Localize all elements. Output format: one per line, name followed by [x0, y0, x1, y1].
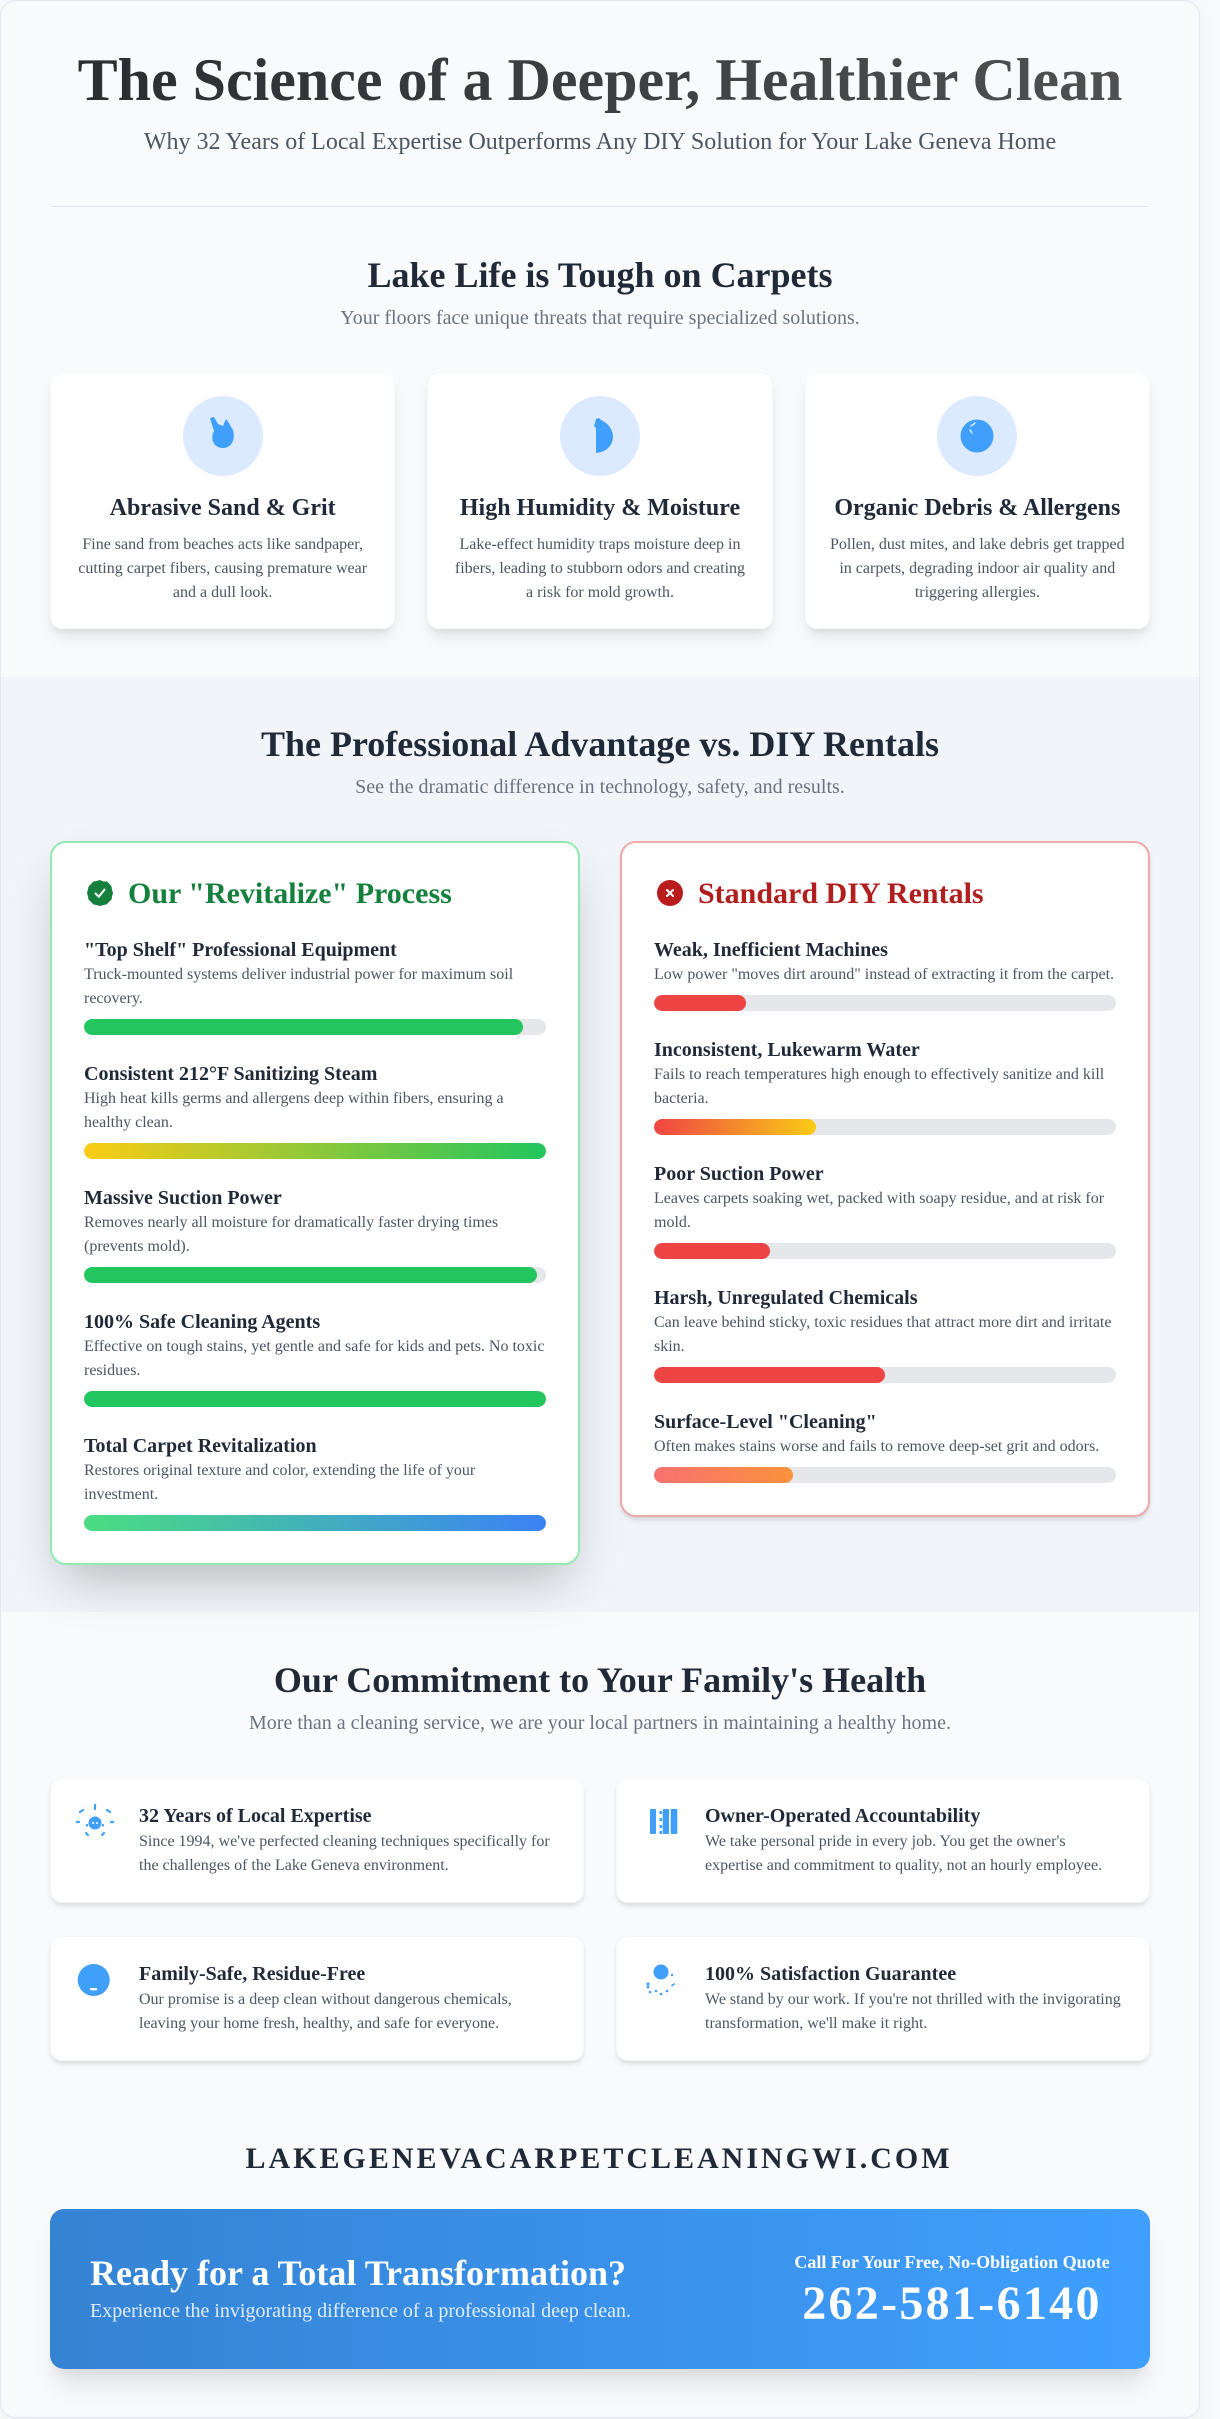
- item: suction: (prevents mold).: [84, 1238, 190, 1255]
- item: safe agents: residues.: [84, 1362, 140, 1379]
- card: humidity: fibers, leading to stubborn odors and creating: [455, 560, 745, 577]
- item: safe agents: Effective on tough stains, yet gentle and safe for kids and pets. No toxic: [84, 1338, 544, 1355]
- cta headline: Ready for a Total Transformation?: [90, 2253, 626, 2293]
- cta subtext: Experience the invigorating difference of a professional deep clean.: [90, 2300, 631, 2322]
- item: suction: Removes nearly all moisture for dramatically faster drying times: [84, 1214, 498, 1231]
- feature text: [139, 1833, 550, 1874]
- subheading: lake life: Your floors face unique threats that require specialized solutions.: [340, 307, 860, 329]
- card: abrasive sand: Fine sand from beaches acts like sandpaper,: [82, 536, 363, 553]
- item: water: Inconsistent, Lukewarm Water: [654, 1039, 920, 1061]
- heading: advantage: The Professional Advantage vs. DIY Rentals: [261, 724, 939, 764]
- subheading: commitment: More than a cleaning service, we are your local partners in maintaining a healthy home.: [249, 1712, 951, 1734]
- item: steam: healthy clean.: [84, 1114, 173, 1131]
- panel: revitalize process: [50, 841, 580, 1565]
- card: abrasive sand: cutting carpet fibers, causing premature wear: [78, 560, 367, 577]
- card: abrasive sand: and a dull look.: [173, 584, 272, 601]
- item: water: Fails to reach temperatures high enough to effectively sanitize and kill: [654, 1066, 1104, 1083]
- card: organic debris: in carpets, degrading indoor air quality and: [839, 560, 1115, 577]
- card: organic debris: [805, 372, 1150, 629]
- feature text: [139, 1991, 512, 2032]
- icon: debris: [937, 396, 1017, 476]
- item: machines: [654, 939, 1116, 1011]
- feature title: Owner-Operated Accountability: [705, 1805, 980, 1827]
- icon: sun badge: [76, 1804, 114, 1836]
- feature: expertise: [50, 1778, 584, 1903]
- heading: commitment: Our Commitment to Your Family's Health: [274, 1660, 926, 1700]
- item: poor suction: Poor Suction Power: [654, 1163, 824, 1185]
- feature text: expertise and commitment to quality, not an hourly employee.: [705, 1857, 1102, 1874]
- item: poor suction: Leaves carpets soaking wet, packed with soapy residue, and at risk for: [654, 1190, 1104, 1207]
- item: water: [654, 1039, 1116, 1135]
- item: surface cleaning: [654, 1411, 1116, 1483]
- item: steam: Consistent 212°F Sanitizing Steam: [84, 1063, 377, 1085]
- item: revitalization: [84, 1435, 546, 1531]
- item: equipment: recovery.: [84, 990, 143, 1007]
- feature text: transformation, we'll make it right.: [705, 2015, 927, 2032]
- item: poor suction: [654, 1163, 1116, 1259]
- item: surface cleaning: Surface-Level "Cleaning": [654, 1411, 877, 1433]
- item: water: bacteria.: [654, 1090, 709, 1107]
- card: humidity: [427, 372, 773, 629]
- call to action banner: [50, 2209, 1150, 2369]
- card: organic debris: Pollen, dust mites, and lake debris get trapped: [830, 536, 1125, 553]
- item: safe agents: [84, 1311, 546, 1407]
- section band: professional advantage: [0, 677, 1200, 1612]
- feature: guarantee: [616, 1936, 1150, 2061]
- item: equipment: "Top Shelf" Professional Equipment: [84, 939, 397, 961]
- item: poor suction: mold.: [654, 1214, 691, 1231]
- feature title: 32 Years of Local Expertise: [139, 1805, 372, 1827]
- item: steam: [84, 1063, 546, 1159]
- feature text: leaving your home fresh, healthy, and safe for everyone.: [139, 2015, 499, 2032]
- card: organic debris: Organic Debris & Allergens: [834, 495, 1120, 521]
- title: The Science of a Deeper, Healthier Clean: [78, 47, 1122, 113]
- icon: droplets: [646, 1964, 675, 1996]
- item: equipment: Truck-mounted systems deliver industrial power for maximum soil: [84, 966, 513, 983]
- feature title: Family-Safe, Residue-Free: [139, 1963, 365, 1985]
- item: revitalization: Total Carpet Revitalization: [84, 1435, 317, 1457]
- item: safe agents: 100% Safe Cleaning Agents: [84, 1311, 320, 1333]
- panel title: Our "Revitalize" Process: [128, 877, 452, 910]
- feature text: the challenges of the Lake Geneva environment.: [139, 1857, 449, 1874]
- feature text: We take personal pride in every job. You get the owner's: [705, 1833, 1066, 1850]
- card: abrasive sand: Abrasive Sand & Grit: [110, 495, 336, 521]
- icon: circle: [78, 1964, 110, 1996]
- item: chemicals: Can leave behind sticky, toxic residues that attract more dirt and irritate: [654, 1314, 1111, 1331]
- feature text: [705, 1991, 1121, 2032]
- item: equipment: [84, 939, 546, 1035]
- card: humidity: a risk for mold growth.: [526, 584, 674, 601]
- item: suction: [84, 1187, 546, 1283]
- subtitle: Why 32 Years of Local Expertise Outperforms Any DIY Solution for Your Lake Geneva Home: [144, 129, 1056, 155]
- icon: green check badge: [87, 880, 113, 906]
- item: surface cleaning: Often makes stains worse and fails to remove deep-set grit and odors.: [654, 1438, 1099, 1455]
- item: revitalization: Restores original texture and color, extending the life of your: [84, 1462, 475, 1479]
- item: machines: Weak, Inefficient Machines: [654, 939, 888, 961]
- item: suction: Massive Suction Power: [84, 1187, 282, 1209]
- panel title: Standard DIY Rentals: [698, 877, 984, 910]
- feature text: We stand by our work. If you're not thrilled with the invigorating: [705, 1991, 1121, 2008]
- item: chemicals: skin.: [654, 1338, 685, 1355]
- item: machines: Low power "moves dirt around" instead of extracting it from the carpet.: [654, 966, 1114, 983]
- website address: LAKEGENEVACARPETCLEANINGWI.COM: [245, 2142, 953, 2175]
- feature text: Since 1994, we've perfected cleaning techniques specifically for: [139, 1833, 550, 1850]
- icon: bars: [650, 1809, 678, 1834]
- feature title: 100% Satisfaction Guarantee: [705, 1963, 956, 1985]
- panel: diy rentals: [620, 841, 1150, 1517]
- icon: sand: [183, 396, 263, 476]
- feature text: Our promise is a deep clean without dangerous chemicals,: [139, 1991, 512, 2008]
- card: abrasive sand: [50, 372, 395, 629]
- feature: accountability: [616, 1778, 1150, 1903]
- item: chemicals: [654, 1287, 1116, 1383]
- card: humidity: Lake-effect humidity traps moisture deep in: [460, 536, 740, 553]
- item: chemicals: Harsh, Unregulated Chemicals: [654, 1287, 918, 1309]
- feature text: [705, 1833, 1102, 1874]
- item: revitalization: investment.: [84, 1486, 158, 1503]
- card: organic debris: triggering allergies.: [915, 584, 1040, 601]
- icon: moisture: [560, 396, 640, 476]
- heading: lake life: Lake Life is Tough on Carpets: [367, 255, 833, 295]
- item: steam: High heat kills germs and allergens deep within fibers, ensuring a: [84, 1090, 504, 1107]
- feature: family safe: [50, 1936, 584, 2061]
- card: humidity: High Humidity & Moisture: [460, 495, 740, 521]
- subheading: advantage: See the dramatic difference in technology, safety, and results.: [355, 776, 845, 798]
- icon: red x: [657, 880, 683, 906]
- cta quote label: Call For Your Free, No-Obligation Quote: [794, 2252, 1110, 2272]
- phone number: 262-581-6140: [802, 2277, 1102, 2330]
